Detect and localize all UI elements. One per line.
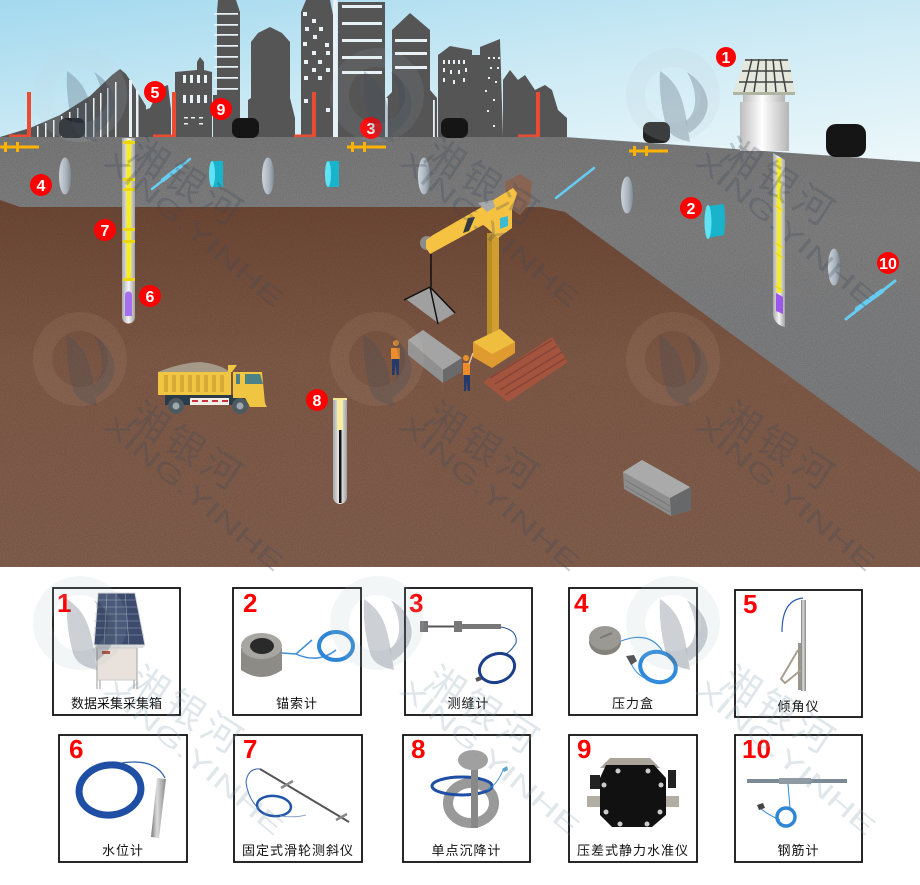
card 3: crack meter: 3 [409, 588, 423, 618]
numbered location markers: 10 [879, 256, 897, 273]
watermark text: 湘银河 [713, 395, 844, 501]
numbered location markers: 8 [313, 393, 322, 410]
card 4: pressure cell: 4 [574, 588, 589, 618]
watermark text over legend panel: 湘银河 [121, 659, 252, 765]
watermark text over legend panel: XING.YINHE [690, 675, 881, 841]
numbered location markers: 4 [37, 178, 46, 195]
watermark text: XING.YINHE [98, 411, 289, 577]
left borehole with inclinometer and water level gauge [122, 138, 135, 324]
ground: excavated brown pit [0, 200, 920, 567]
card 10: rebar meter [735, 734, 862, 862]
watermark text: 湘银河 [121, 395, 252, 501]
watermark logos [33, 48, 720, 670]
watermark text over legend panel: XING.YINHE [98, 675, 289, 841]
pile of red steel pipes [483, 337, 568, 402]
card 8: single point settlement gauge: 8 [411, 734, 425, 764]
card 8: single point settlement gauge [403, 734, 530, 862]
card 2: anchor cable meter: 锚索计 [276, 696, 318, 711]
card 10: rebar meter: 10 [742, 734, 771, 764]
card 6: water level gauge: 6 [69, 734, 83, 764]
construction workers [391, 340, 473, 391]
watermark text: XING.YINHE [394, 411, 585, 577]
rebar meters [152, 159, 895, 319]
card 2: anchor cable meter: 2 [243, 588, 257, 618]
card 1: data acquisition box [53, 588, 180, 715]
numbered location markers: 7 [101, 223, 110, 240]
watermark text: 湘银河 [121, 131, 252, 237]
card 6: water level gauge: 水位计 [102, 843, 144, 858]
black hydrostatic level pads [59, 118, 866, 157]
anchor cable meters [209, 161, 725, 239]
card 1: data acquisition box: 数据采集采集箱 [71, 696, 162, 711]
watermark text: XING.YINHE [394, 147, 585, 313]
card 1: data acquisition box: 1 [57, 588, 71, 618]
watermark text: 湘银河 [417, 131, 548, 237]
numbered location markers: 6 [146, 289, 155, 306]
watermark text [98, 131, 881, 577]
single point settlement gauge borehole [333, 398, 347, 504]
card 3: crack meter [405, 588, 532, 715]
right borehole with inclinometer and water level gauge [773, 153, 785, 327]
skyline light details [37, 0, 500, 137]
card 5: tilt meter [735, 589, 862, 717]
card 8: single point settlement gauge: 单点沉降计 [431, 843, 502, 858]
card 6: water level gauge [59, 734, 187, 862]
card 7: fixed pulley inclinometer: 固定式滑轮测斜仪 [242, 843, 354, 858]
ground: grey road embankment [0, 137, 920, 480]
watermark text over legend panel: 湘银河 [417, 659, 548, 765]
watermark text: XING.YINHE [98, 147, 289, 313]
ground grain texture [0, 137, 920, 567]
city skyline [0, 0, 567, 137]
pressure cells [59, 158, 840, 286]
stacked precast slabs lower right [623, 460, 691, 516]
watermark text: XING.YINHE [690, 411, 881, 577]
card 3: crack meter: 测缝计 [447, 696, 490, 711]
numbered location markers: 1 [722, 50, 731, 67]
orange crack meters [0, 142, 668, 156]
red inclinometer brackets [9, 92, 540, 137]
card 7: fixed pulley inclinometer [234, 734, 362, 862]
numbered location markers: 5 [151, 85, 160, 102]
solar data acquisition station [733, 59, 795, 151]
card 9: differential pressure hydrostatic level: 压差式静力水准仪 [577, 843, 689, 858]
numbered location markers: 3 [367, 121, 376, 138]
card 5: tilt meter: 倾角仪 [777, 699, 820, 714]
numbered location markers [30, 47, 899, 411]
tower crane [404, 174, 532, 368]
card 9: differential pressure hydrostatic level [569, 734, 697, 862]
card 2: anchor cable meter [233, 588, 361, 715]
card 5: tilt meter: 5 [743, 589, 757, 619]
card 9: differential pressure hydrostatic level: 9 [577, 734, 591, 764]
watermark text: 湘银河 [713, 131, 844, 237]
watermark text: XING.YINHE [690, 147, 881, 313]
numbered location markers: 9 [217, 102, 226, 119]
stacked precast slabs near crane [408, 330, 462, 383]
watermark text over legend panel: XING.YINHE [394, 675, 585, 841]
card 4: pressure cell [569, 588, 697, 715]
dump truck [158, 362, 267, 414]
numbered location markers: 2 [687, 201, 696, 218]
watermark text over legend panel [98, 659, 881, 841]
card 4: pressure cell: 压力盒 [612, 696, 654, 711]
sky background [0, 0, 920, 240]
card 10: rebar meter: 钢筋计 [777, 843, 820, 858]
watermark text over legend panel: 湘银河 [713, 659, 844, 765]
watermark text: 湘银河 [417, 395, 548, 501]
legend panel background [0, 567, 920, 885]
card 7: fixed pulley inclinometer: 7 [243, 734, 257, 764]
